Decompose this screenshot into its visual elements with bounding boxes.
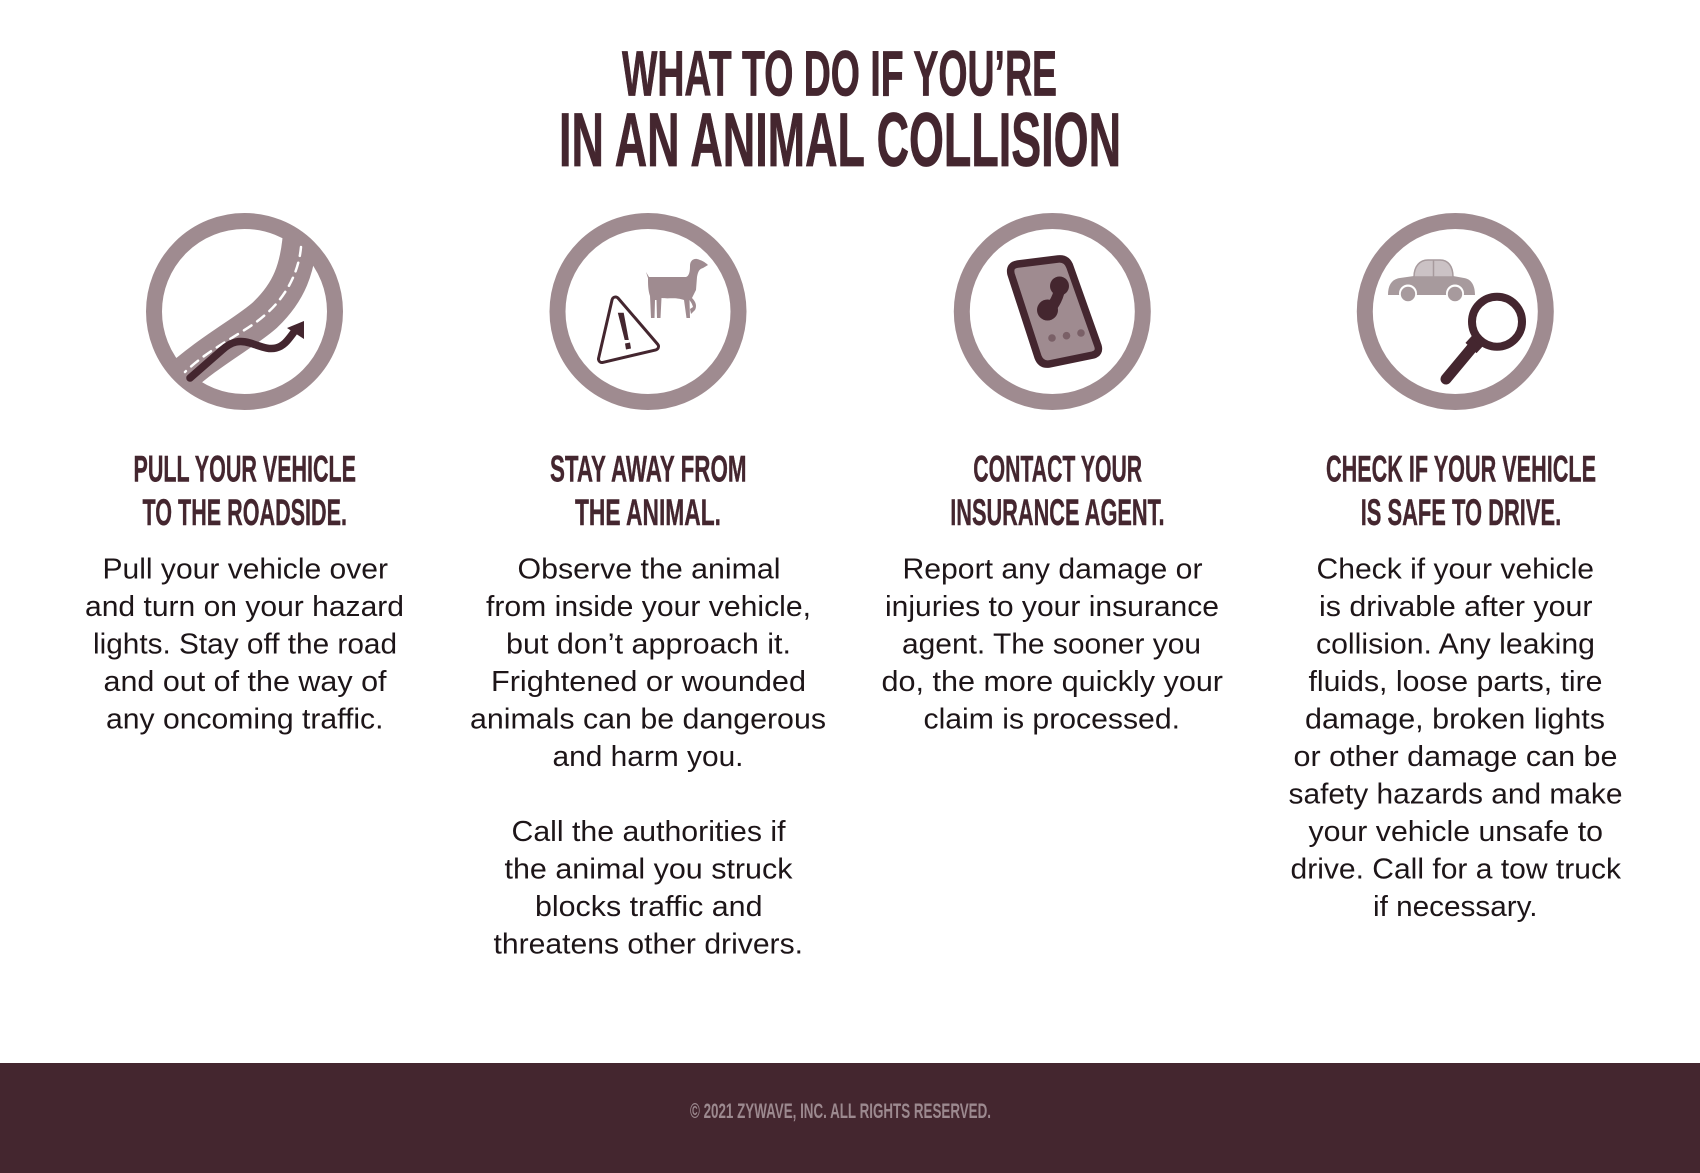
text: contact agent body: do, the more quickly your: [882, 666, 1224, 698]
footer: [0, 1063, 1700, 1173]
text: stay away body: Call the authorities if: [512, 816, 786, 848]
text: check vehicle body: [1288, 553, 1622, 923]
text: pull your vehicle body: lights. Stay off the road: [93, 628, 397, 660]
heading: check if vehicle safe: [1326, 448, 1596, 533]
text: stay away body: Observe the animal: [518, 553, 780, 585]
panel: stay away from the animal: [470, 221, 826, 960]
text: check vehicle body: safety hazards and make: [1288, 778, 1622, 810]
panel: check if your vehicle is safe to drive: [1288, 221, 1622, 923]
text: stay away body: from inside your vehicle,: [486, 591, 811, 623]
panel: pull your vehicle to the roadside: [85, 221, 404, 735]
text: pull your vehicle body: any oncoming traffic.: [106, 703, 384, 735]
text: stay away body: but don’t approach it.: [506, 628, 791, 660]
icon: warning triangle and animal: [558, 221, 738, 402]
text: pull your vehicle body: and turn on your hazard: [85, 591, 404, 623]
text: check vehicle body: Check if your vehicle: [1316, 553, 1594, 585]
footer: © 2021 ZYWAVE, INC. ALL RIGHTS RESERVED.: [690, 1100, 991, 1123]
heading: stay away from the animal: [550, 448, 746, 533]
text: pull your vehicle body: and out of the way of: [104, 666, 387, 698]
text: stay away body: [470, 553, 826, 960]
text: contact agent body: injuries to your insurance: [885, 591, 1219, 623]
text: contact agent body: [882, 553, 1224, 735]
text: stay away body: Frightened or wounded: [491, 666, 806, 698]
heading: stay away from the animal: STAY AWAY FROM: [550, 448, 746, 490]
title: WHAT TO DO IF YOU’RE: [622, 38, 1057, 110]
text: check vehicle body: or other damage can be: [1294, 741, 1618, 773]
text: check vehicle body: drive. Call for a tow truck: [1290, 853, 1622, 885]
text: check vehicle body: fluids, loose parts, tire: [1308, 666, 1602, 698]
text: contact agent body: agent. The sooner you: [902, 628, 1201, 660]
heading: pull your vehicle: PULL YOUR VEHICLE: [134, 448, 356, 490]
text: contact agent body: Report any damage or: [902, 553, 1203, 585]
text: stay away body: threatens other drivers.: [494, 928, 803, 960]
text: check vehicle body: if necessary.: [1373, 891, 1538, 923]
icon: road with swerving arrow: [154, 221, 335, 402]
text: check vehicle body: damage, broken lights: [1305, 703, 1605, 735]
heading: contact your insurance agent: [950, 448, 1164, 533]
heading: stay away from the animal: THE ANIMAL.: [575, 492, 721, 533]
icon: car and magnifying glass: [1365, 221, 1546, 402]
panel: contact your insurance agent: [882, 221, 1224, 735]
heading: check if vehicle safe: IS SAFE TO DRIVE.: [1361, 492, 1561, 533]
title: IN AN ANIMAL COLLISION: [559, 98, 1121, 183]
heading: pull your vehicle: [134, 448, 356, 533]
icon: mobile phone: [962, 221, 1143, 402]
text: check vehicle body: collision. Any leaking: [1316, 628, 1595, 660]
text: pull your vehicle body: [85, 553, 404, 735]
text: stay away body: and harm you.: [552, 741, 744, 773]
text: contact agent body: claim is processed.: [924, 703, 1180, 735]
text: stay away body: blocks traffic and: [535, 891, 762, 923]
heading: pull your vehicle: TO THE ROADSIDE.: [142, 492, 347, 533]
text: stay away body: animals can be dangerous: [470, 703, 826, 735]
title: [559, 38, 1121, 183]
heading: contact your insurance agent: CONTACT YOUR: [973, 448, 1142, 490]
text: stay away body: the animal you struck: [504, 853, 793, 885]
text: check vehicle body: is drivable after your: [1319, 591, 1593, 623]
heading: contact your insurance agent: INSURANCE AGENT.: [950, 492, 1164, 533]
text: pull your vehicle body: Pull your vehicle over: [102, 553, 389, 585]
text: check vehicle body: your vehicle unsafe to: [1308, 816, 1603, 848]
